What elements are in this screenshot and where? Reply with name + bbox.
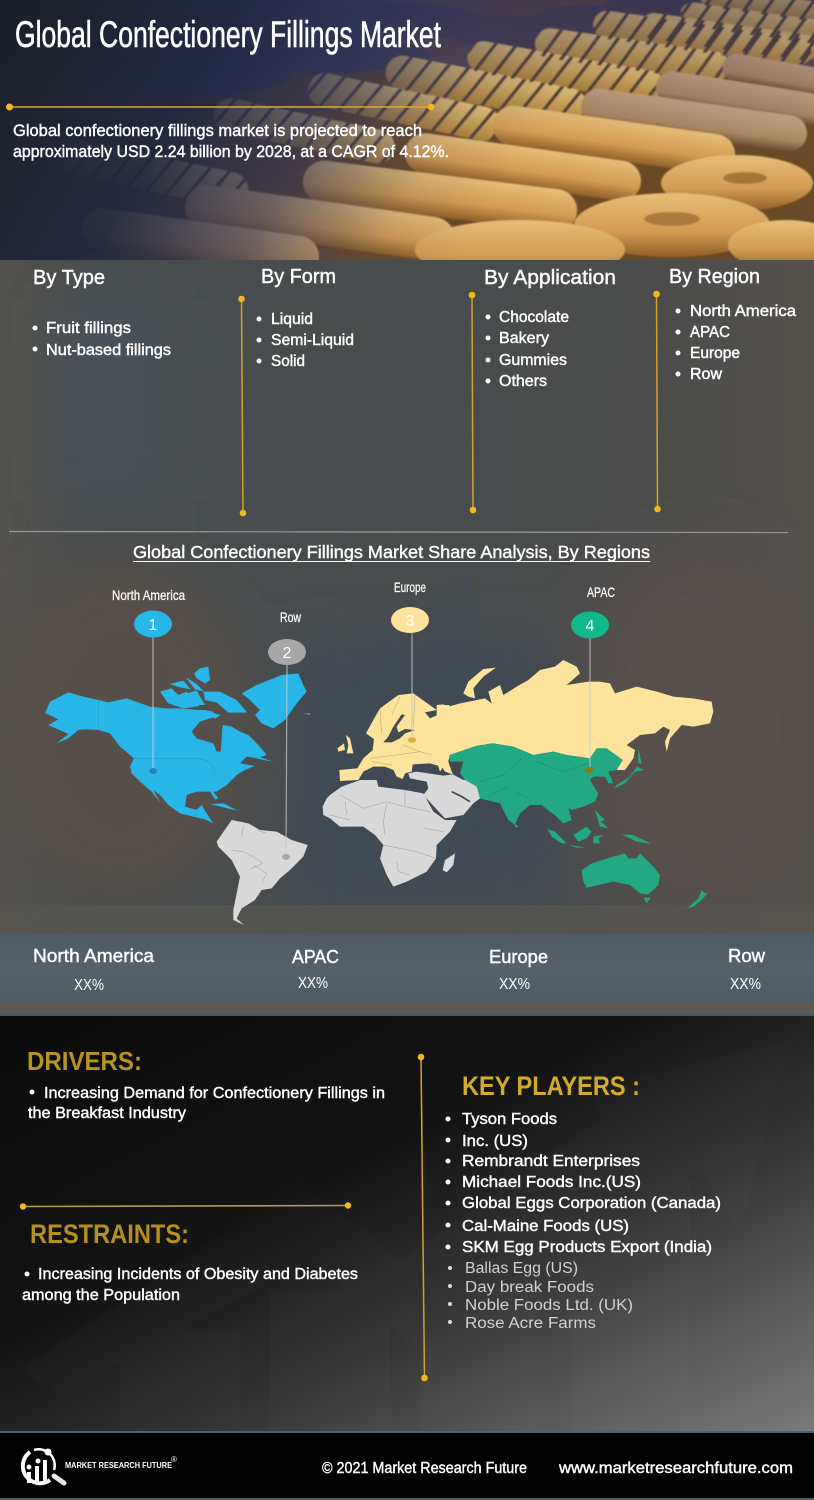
segment column: By Type: [32, 267, 171, 359]
restraints text: among the Population: [22, 1287, 180, 1304]
share: Row: XX%: [730, 976, 761, 993]
segment column: By Application: Bakery: [499, 330, 549, 347]
top dark donuts: [246, 0, 700, 91]
share: Europe: XX%: [499, 976, 530, 993]
world map: [45, 660, 713, 925]
share: Row: Row: [728, 946, 766, 966]
map pin 3: Europe: 3: [406, 613, 415, 630]
map: Africa and Middle East: [323, 772, 480, 887]
map pin 2: Row: Row: [280, 609, 302, 625]
striped biscuits, back rows: [122, 0, 814, 198]
map heading: Global Confectionery Fillings Market Share Analysis, By Regions: [133, 542, 650, 562]
map: South America: [217, 820, 308, 925]
segment column: By Form: Semi-Liquid: [271, 332, 354, 349]
segment column: By Type: Nut-based fillings: [46, 342, 171, 359]
share: APAC: APAC: [292, 947, 339, 967]
key players list: Day break Foods: [465, 1279, 594, 1296]
segment column: By Application: Chocolate: [499, 309, 569, 326]
map: North America: [45, 667, 310, 823]
title: Global Confectionery Fillings Market: [15, 14, 442, 55]
map: Europe and Russia: [337, 660, 713, 781]
map: Asia Pacific: [449, 743, 708, 908]
map pin 3: Europe: [391, 579, 429, 743]
share: North America: [33, 946, 155, 994]
segment column: By Form: Solid: [271, 353, 305, 370]
gold divider: application / region: [653, 291, 661, 512]
segment column: By Region: North America: [690, 303, 796, 320]
key players list: Inc. (US): [462, 1133, 528, 1150]
share: Europe: [489, 947, 548, 993]
map pin 4: APAC: APAC: [587, 584, 615, 600]
logo: ®: [171, 1455, 177, 1464]
map pin 1: North America: 1: [149, 617, 158, 634]
segment column: By Form: Liquid: [271, 311, 313, 328]
key players list: Rose Acre Farms: [465, 1315, 596, 1332]
plain biscuits, front rows: [720, 52, 814, 96]
segment column: By Application: Others: [499, 373, 547, 390]
hero photo: filled cookies: [0, 0, 814, 280]
restraints text: Increasing Incidents of Obesity and Diabetes: [38, 1266, 358, 1283]
map pin 4: APAC: [571, 584, 615, 773]
ring doughnuts: [661, 155, 813, 211]
intro text: approximately USD 2.24 billion by 2028, at a CAGR of 4.12%.: [13, 143, 449, 161]
intro text: Global confectionery fillings market is projected to reach: [13, 122, 422, 140]
gold rule between drivers and restraints: [20, 1202, 351, 1210]
segment column: By Form: [256, 266, 354, 370]
segment column: By Application: [484, 267, 616, 390]
segment column: By Region: [669, 266, 796, 383]
key players heading: KEY PLAYERS :: [462, 1071, 640, 1101]
segment column: By Type: By Type: [33, 267, 105, 289]
key players list: [446, 1111, 721, 1332]
map pin 2: Row: 2: [283, 645, 292, 662]
drivers text: Increasing Demand for Confectionery Fillings in: [44, 1085, 385, 1102]
drivers heading: DRIVERS:: [27, 1046, 142, 1076]
gold divider: type / form: [238, 296, 246, 516]
share: APAC: XX%: [298, 975, 328, 992]
market share band: [0, 934, 814, 1002]
restraints heading: RESTRAINTS:: [30, 1219, 189, 1249]
key players list: Global Eggs Corporation (Canada): [462, 1195, 721, 1212]
segment column: By Type: Fruit fillings: [46, 320, 131, 337]
drivers text: [28, 1085, 385, 1122]
key players list: Ballas Egg (US): [465, 1260, 578, 1277]
drivers text: the Breakfast Industry: [28, 1105, 186, 1122]
segment column: By Region: Row: [690, 366, 723, 383]
share: APAC: [292, 947, 339, 992]
segment column: By Region: Europe: [690, 345, 740, 362]
segment column: By Form: By Form: [261, 266, 336, 288]
share: North America: XX%: [74, 977, 104, 994]
key players list: Noble Foods Ltd. (UK): [465, 1297, 633, 1314]
intro text: [13, 122, 449, 161]
segment column: By Application: Gummies: [499, 352, 567, 369]
key players list: Tyson Foods: [462, 1111, 557, 1128]
key players list: Rembrandt Enterprises: [462, 1153, 640, 1170]
map pin 3: Europe: Europe: [394, 579, 426, 595]
lower panel background: [0, 1014, 814, 1432]
key players list: Cal-Maine Foods (US): [462, 1218, 629, 1235]
footer copyright: © 2021 Market Research Future: [322, 1460, 527, 1477]
hero gold rule: [6, 104, 434, 110]
share: Row: [728, 946, 766, 993]
footer website: www.marketresearchfuture.com: [558, 1460, 793, 1477]
segment column: By Region: By Region: [669, 266, 760, 288]
map pin 1: North America: North America: [112, 587, 185, 603]
segment column: By Application: By Application: [484, 267, 616, 289]
key players list: SKM Egg Products Export (India): [462, 1239, 712, 1256]
restraints text: [22, 1266, 358, 1304]
vertical gold divider: [418, 1054, 428, 1381]
share: North America: North America: [33, 946, 155, 966]
icon: magnifier with bars: [23, 1448, 64, 1483]
footer bar: [0, 1431, 814, 1500]
key players list: Michael Foods Inc.(US): [462, 1174, 641, 1191]
logo: MARKET RESEARCH FUTURE: [65, 1461, 173, 1470]
share: Europe: Europe: [489, 947, 548, 967]
segmentation panel and map panel background: [0, 260, 814, 1015]
map pin 4: APAC: 4: [586, 618, 595, 635]
logo: [23, 1448, 177, 1483]
map pin 2: Row: [268, 609, 306, 860]
map pin 1: North America: [112, 587, 185, 774]
segment column: By Region: APAC: [690, 324, 730, 341]
gold divider: form / application: [469, 292, 476, 513]
